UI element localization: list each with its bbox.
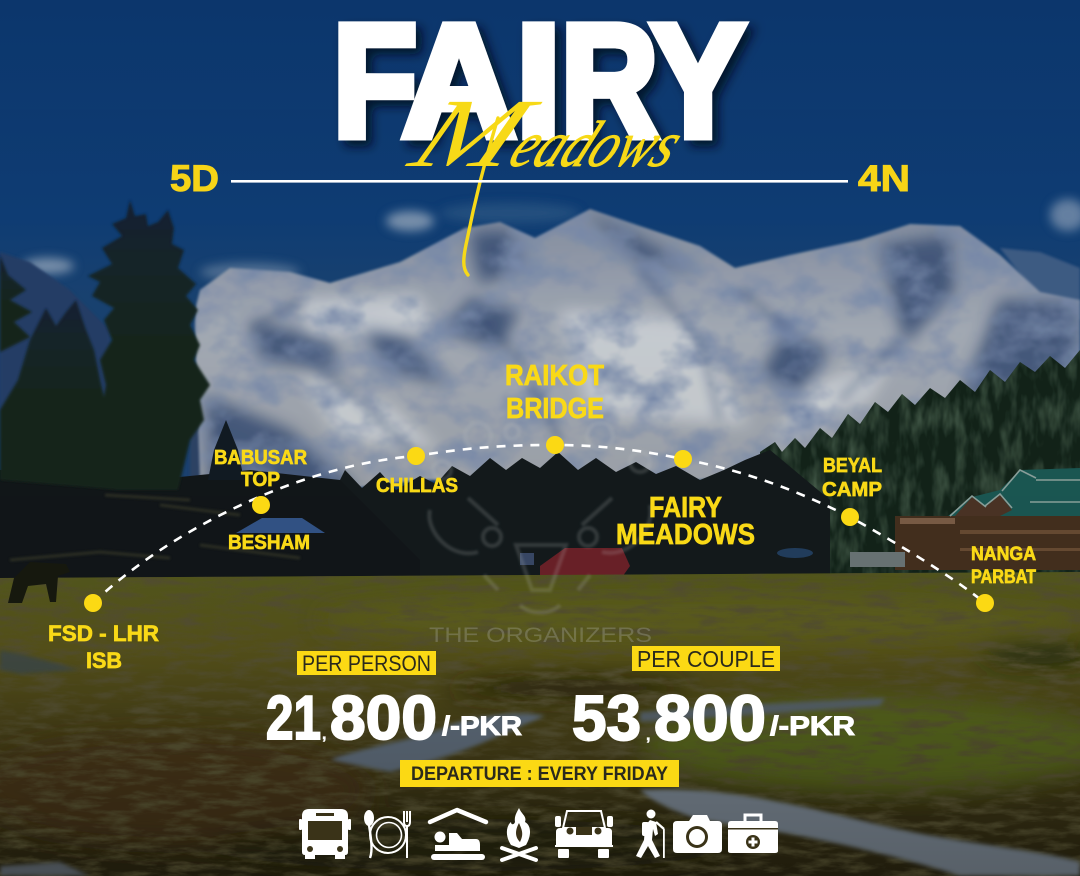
price tag: per person: PER PERSON <box>302 651 431 676</box>
watermark text: THE ORGANIZERS <box>429 624 652 647</box>
background: horse <box>8 562 70 603</box>
icon: plate and cutlery <box>364 810 410 858</box>
label: Nanga Parbat: NANGA <box>971 544 1036 565</box>
label: Beyal Camp: CAMP <box>822 479 882 501</box>
label: Besham: BESHAM <box>228 532 310 554</box>
label: Raikot Bridge <box>505 360 604 425</box>
label: Chillas: CHILLAS <box>376 475 458 497</box>
label: Raikot Bridge: RAIKOT <box>505 360 604 392</box>
price: 21,800: 21 <box>266 684 321 753</box>
background: right lodge <box>777 468 1080 570</box>
background: distant ridges <box>0 248 1080 480</box>
icon: jeep <box>555 811 613 858</box>
label: Fairy Meadows: FAIRY <box>649 492 722 524</box>
background: sky <box>0 0 1080 480</box>
title script: Meadows: eadows <box>499 108 695 180</box>
label: Babusar Top: BABUSAR <box>214 447 308 469</box>
background: meadow <box>0 570 1080 876</box>
background: clouds <box>22 199 1080 281</box>
label: Babusar Top <box>214 447 308 491</box>
departure banner: DEPARTURE : EVERY FRIDAY <box>411 764 668 785</box>
icon: bus <box>299 809 351 859</box>
background: blue roof <box>236 518 325 533</box>
price: 53,800: 53 <box>572 682 641 754</box>
price: 21,800 <box>266 684 522 753</box>
label: Fairy Meadows: MEADOWS <box>616 519 755 551</box>
icon: camera <box>673 815 722 853</box>
watermark ornament <box>429 423 651 612</box>
icon: first aid kit <box>728 815 778 853</box>
price: 53,800 <box>572 682 855 754</box>
price: 21,800: 800 <box>330 684 437 753</box>
price: 21,800: , <box>322 726 326 743</box>
script flourish: long M descender <box>464 118 498 275</box>
price: 53,800: 800 <box>654 682 766 754</box>
label: Nanga Parbat: PARBAT <box>971 567 1036 588</box>
background: small conifer near Besham <box>208 420 244 480</box>
price tag: per couple: PER COUPLE <box>637 646 775 672</box>
route: stop markers <box>84 436 994 612</box>
background: red roof building <box>520 548 630 580</box>
background: tall conifers left <box>0 200 210 490</box>
label: Nanga Parbat <box>971 544 1036 588</box>
route: dashed arc <box>93 445 985 603</box>
icon: campfire <box>502 808 536 860</box>
icon: shelter and bed <box>430 810 486 860</box>
background: left hill <box>0 470 420 590</box>
label: FSD-LHR ISB: FSD - LHR <box>48 621 159 646</box>
price: 53,800: , <box>646 727 650 744</box>
duration: 4N: 4N <box>858 158 910 199</box>
duration rule <box>170 158 910 199</box>
price: 21,800: /-PKR <box>442 711 522 741</box>
label: Fairy Meadows <box>616 492 755 551</box>
title script: Meadows <box>393 80 709 275</box>
title script: Meadows: M <box>393 80 554 188</box>
background: snow mountains <box>190 200 1080 490</box>
price: 53,800: /-PKR <box>770 711 855 741</box>
label: FSD-LHR ISB: ISB <box>86 648 122 673</box>
amenity icons <box>299 808 778 860</box>
label: Beyal Camp <box>822 455 882 501</box>
icon: hiker <box>636 810 665 858</box>
duration: 5D: 5D <box>170 158 219 199</box>
label: Raikot Bridge: BRIDGE <box>506 393 604 425</box>
label: Beyal Camp: BEYAL <box>823 455 882 477</box>
background: right forest <box>760 350 1080 574</box>
background: center forest <box>330 450 830 590</box>
route: stop labels <box>48 360 1036 673</box>
label: Babusar Top: TOP <box>241 469 280 491</box>
label: FSD-LHR ISB <box>48 621 159 673</box>
